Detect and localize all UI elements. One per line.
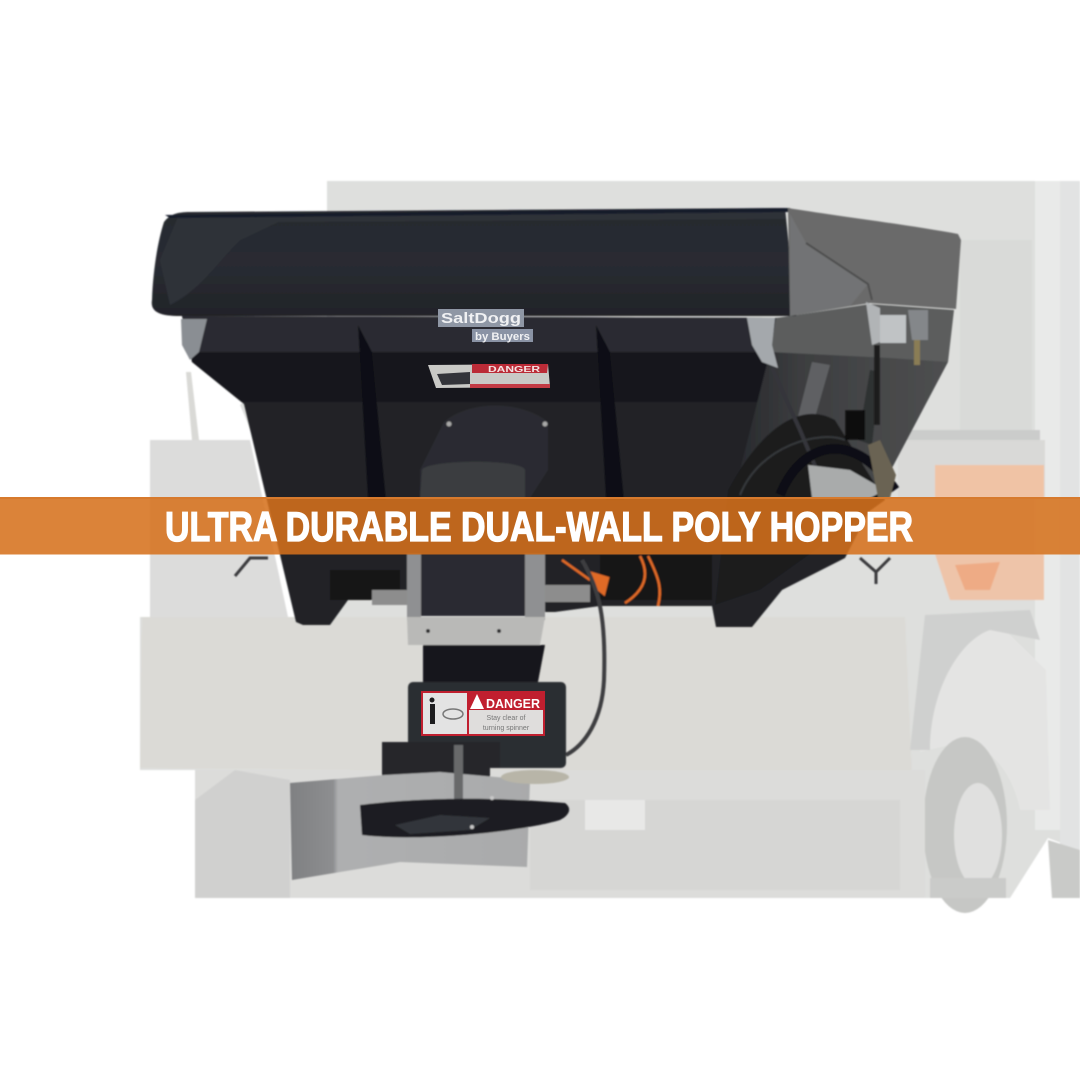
- spinner disc: [360, 796, 569, 837]
- hopper body front: [182, 316, 890, 627]
- lower hooks: [235, 558, 890, 584]
- chute upper shroud: [420, 406, 548, 498]
- safety chain: [772, 368, 825, 490]
- hopper logo: SaltDogg by Buyers: by Buyers: [475, 331, 530, 343]
- orange wires: [562, 556, 660, 606]
- spinner shaft: [454, 745, 463, 805]
- faded orange panel: [898, 440, 1045, 600]
- hopper bracket bolts: [372, 585, 590, 605]
- hopper warning decal: [428, 364, 550, 388]
- hopper side panels: [715, 304, 954, 605]
- tarp lid side: [788, 208, 961, 316]
- cable to spinner motor: [566, 560, 604, 755]
- infographic canvas: [0, 180, 1080, 914]
- spinner danger decal: turning spinner: [483, 725, 530, 732]
- left corner latch: [181, 319, 207, 360]
- hopper logo: SaltDogg by Buyers: [438, 309, 533, 343]
- deflector plate: [290, 772, 530, 880]
- motor housing: [408, 682, 566, 768]
- tarp lid front: [152, 208, 796, 316]
- faded truck background photo: [140, 181, 1080, 913]
- bottom hopper shadows: [330, 555, 712, 600]
- spinner danger decal: [421, 691, 545, 736]
- hopper warning decal: DANGER: [488, 365, 540, 374]
- spinner danger decal: DANGER: [486, 696, 541, 711]
- faded tailgate: [140, 617, 912, 775]
- banner headline: ULTRA DURABLE DUAL-WALL POLY HOPPER: [165, 503, 913, 550]
- hopper shaded bands: [184, 316, 766, 497]
- faded chassis: [195, 770, 925, 898]
- pictogram: person and spinner: [430, 698, 463, 724]
- right side logo plate and latches: [866, 302, 928, 425]
- center latch: [747, 318, 778, 368]
- motor bracket: [382, 742, 500, 785]
- faded utility box left: [150, 372, 288, 617]
- faded fender: [920, 625, 1050, 810]
- orange banner: [0, 497, 1080, 554]
- faded wheel: [923, 737, 1007, 913]
- chute lower section: [407, 554, 545, 682]
- motor gear disc: [501, 770, 569, 784]
- spinner danger decal: Stay clear of: [487, 715, 526, 722]
- hopper logo: SaltDogg by Buyers: SaltDogg: [441, 310, 521, 327]
- spreader hopper photo: [152, 208, 961, 880]
- hydraulic hoses and motor: [740, 410, 896, 498]
